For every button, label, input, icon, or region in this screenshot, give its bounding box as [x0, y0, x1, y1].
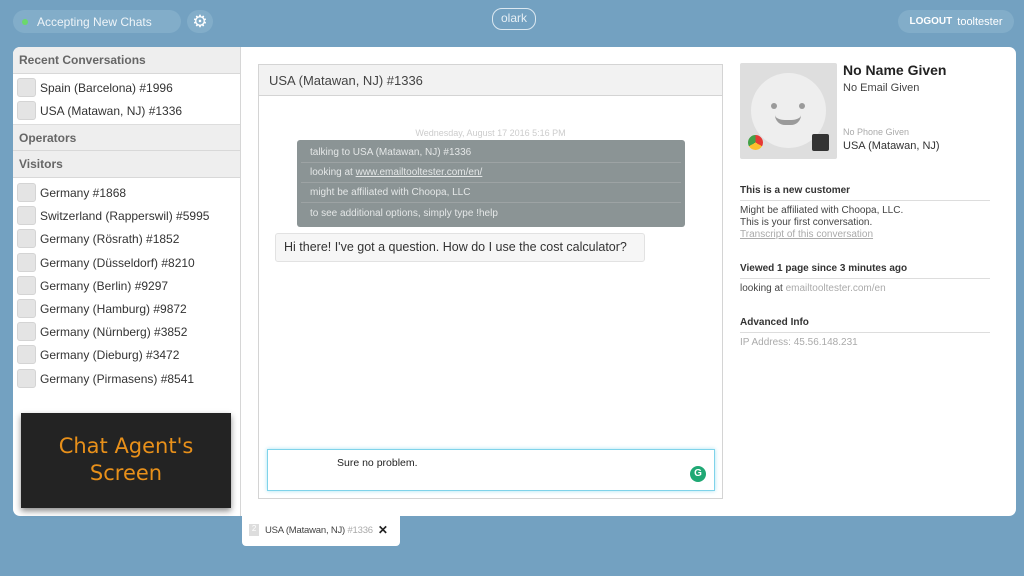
callout: chat agent's screen: Chat Agent's: [59, 434, 193, 458]
text: customer details: [740, 205, 903, 240]
section: new customer: This is a new customer: [740, 185, 850, 196]
sidebar header: visitors: Visitors: [19, 157, 63, 171]
visitors list: Germany (Nürnberg) #3852: [40, 324, 187, 338]
icon: settings gear: [187, 10, 213, 33]
timestamp: Wednesday, August 17 2016 5:16 PM: [415, 128, 566, 138]
system info message: might be affiliated with Choopa, LLC: [310, 187, 470, 198]
section: viewed pages: [740, 263, 990, 279]
bottom tab: [242, 514, 400, 546]
text: customer details: This is your first conversation.: [740, 217, 872, 228]
logout pill: [898, 10, 1014, 33]
icon: settings gear: ⚙: [192, 12, 208, 31]
visitor name block: No Phone Given: [843, 127, 909, 137]
logout pill: tooltester: [957, 16, 1003, 28]
chat header: [259, 65, 722, 96]
visitors list: Switzerland (Rapperswil) #5995: [40, 208, 209, 222]
visitors list: Germany (Hamburg) #9872: [40, 302, 187, 316]
system info message: [297, 140, 685, 227]
reply input: [267, 449, 715, 491]
top bar: accepting chats pill: [13, 10, 181, 33]
icon: grammarly: [690, 466, 706, 482]
system info message: looking at: [310, 167, 353, 178]
visitor message bubble: [275, 233, 645, 262]
reply input: Sure no problem.: [337, 457, 418, 469]
sidebar header: recent conversations: Recent Conversations: [19, 53, 146, 67]
chat window: [258, 64, 723, 499]
text: looking at: looking at emailtooltester.com/en: [740, 283, 886, 294]
icon: apple: [812, 134, 829, 151]
recent list: Spain (Barcelona) #1996: [40, 80, 173, 94]
logo: olark: [492, 8, 536, 30]
visitor name block: [843, 62, 946, 152]
visitor name block: No Email Given: [843, 82, 919, 94]
visitors list: Germany (Düsseldorf) #8210: [40, 256, 195, 270]
top bar: accepting chats pill: Accepting New Chats: [37, 14, 152, 28]
system info message: to see additional options, simply type !help: [310, 208, 498, 218]
recent list: [17, 78, 182, 120]
section: advanced info: Advanced Info: [740, 317, 809, 328]
visitors list: Germany (Pirmasens) #8541: [40, 372, 194, 386]
visitors list: [17, 183, 209, 388]
section: viewed pages: Viewed 1 page since 3 minutes ago: [740, 263, 907, 274]
chat header: USA (Matawan, NJ) #1336: [269, 73, 423, 88]
icon: grammarly: G: [694, 468, 702, 479]
main panel: [13, 47, 1016, 516]
visitors list: Germany (Rösrath) #1852: [40, 232, 179, 246]
logo: olark: olark: [501, 11, 527, 25]
callout: chat agent's screen: Screen: [90, 461, 162, 485]
recent list: USA (Matawan, NJ) #1336: [40, 104, 182, 118]
logout pill: LOGOUT: [909, 16, 952, 27]
sidebar: [13, 47, 241, 516]
visitors list: Germany (Dieburg) #3472: [40, 348, 179, 362]
text: ip address: IP Address: 45.56.148.231: [740, 337, 858, 348]
visitor name block: No Name Given: [843, 62, 946, 78]
visitors list: Germany #1868: [40, 186, 126, 200]
visitors list: Germany (Berlin) #9297: [40, 278, 168, 292]
visitor message bubble: Hi there! I've got a question. How do I use the cost calculator?: [284, 240, 627, 254]
visitor name block: USA (Matawan, NJ): [843, 140, 940, 152]
system info message: talking to USA (Matawan, NJ) #1336: [310, 147, 471, 158]
text: customer details: Might be affiliated with Choopa, LLC.: [740, 205, 903, 216]
bottom tab: #1336: [347, 524, 373, 536]
system info message: www.emailtooltester.com/en/: [356, 167, 482, 178]
sidebar header: operators: [13, 124, 240, 151]
section: new customer: [740, 185, 990, 201]
sidebar header: visitors: [13, 151, 240, 178]
callout: chat agent's screen: [21, 413, 231, 508]
section: advanced info: [740, 317, 990, 333]
visitor avatar: [740, 63, 837, 159]
sidebar header: recent conversations: [13, 47, 240, 74]
sidebar header: operators: Operators: [19, 130, 76, 144]
bottom tab: ✕: [378, 523, 388, 537]
text: customer details: Transcript of this conversation: [740, 229, 873, 240]
icon: chrome: [748, 135, 763, 150]
bottom tab: 2: [252, 524, 256, 533]
bottom tab: USA (Matawan, NJ): [265, 524, 345, 536]
